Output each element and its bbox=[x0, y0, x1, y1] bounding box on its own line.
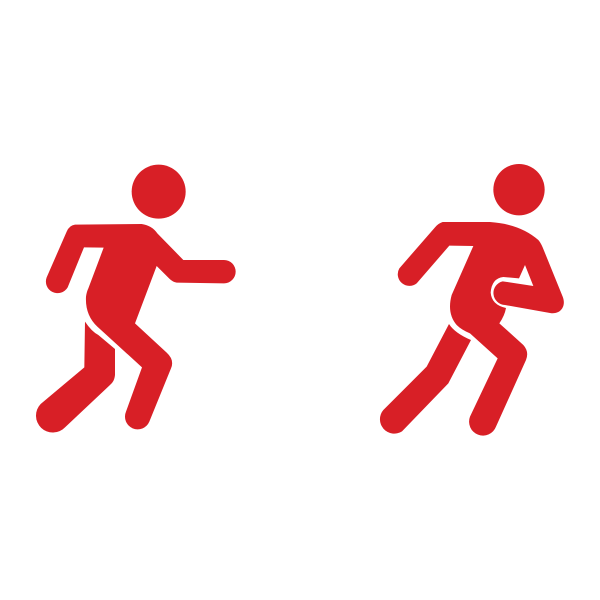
right figure back leg bbox=[380, 324, 471, 434]
right figure torso, arms and front leg bbox=[398, 222, 564, 436]
right figure head bbox=[493, 164, 545, 215]
icon: right running figure bbox=[380, 164, 564, 436]
icon: left running figure bbox=[36, 165, 236, 433]
left figure torso, arms and front leg bbox=[46, 224, 236, 429]
left figure head bbox=[132, 165, 186, 219]
left figure back leg bbox=[36, 322, 115, 433]
